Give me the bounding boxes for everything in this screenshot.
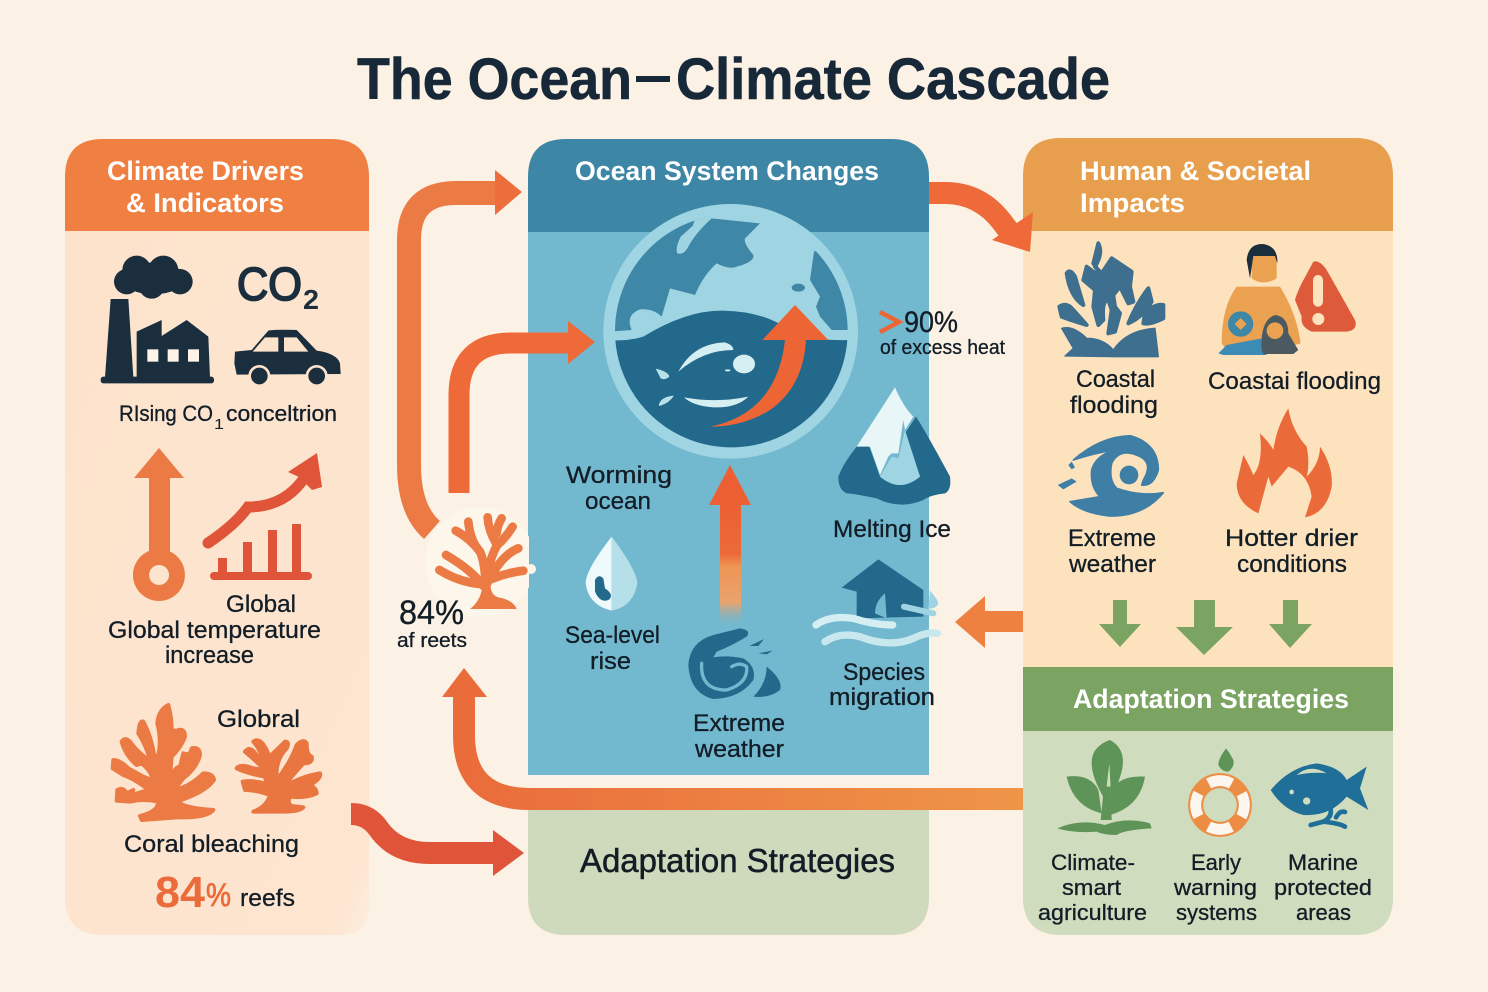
icon: flooded house (816, 559, 938, 643)
icon: water drop (586, 537, 637, 611)
stat: 84% of reefs: 84% (399, 594, 464, 632)
icon: life ring with drop (1196, 748, 1244, 829)
arrow: ocean system to human impacts (929, 193, 1033, 252)
icon: flame (1237, 408, 1332, 517)
stat: 84% reefs: reefs (240, 885, 295, 912)
label: climate-smart agriculture: agriculture (1038, 900, 1147, 925)
label: species migration: migration (829, 684, 935, 711)
icon: CO2 label: 2 (303, 284, 319, 315)
label: extreme weather: weather (694, 736, 784, 763)
panel: adaptation strategies (right) (1023, 667, 1393, 935)
label: extreme weather: Extreme (693, 710, 785, 737)
panel: human and societal impacts (1023, 138, 1393, 667)
panel header: climate drivers (65, 139, 369, 231)
icon: blue coral (1059, 243, 1163, 357)
label: melting ice: Melting Ice (833, 516, 951, 543)
panel: ocean system changes (528, 139, 929, 775)
label: extreme weather (right): Extreme (1068, 525, 1156, 552)
label: sea-level rise (565, 622, 660, 675)
icon: people with warning sign (1218, 244, 1356, 355)
label: early warning systems (1173, 850, 1257, 925)
arrow: impacts back to ocean system (955, 596, 1023, 648)
label: coastal flooding (left): flooding (1070, 392, 1158, 419)
icon: plant (1057, 740, 1152, 835)
label: early warning systems: systems (1176, 900, 1257, 925)
title: Climate Cascade (676, 47, 1110, 112)
arrows: down to adaptation (1099, 600, 1312, 655)
label: warming ocean (566, 462, 672, 515)
panel header: human and societal impacts: Human & Societal (1080, 156, 1311, 186)
label: climate-smart agriculture: Climate- (1051, 850, 1135, 875)
stat: greater than 90% of excess heat: of excess heat (880, 337, 1005, 359)
icon: central coral with halo (435, 513, 536, 609)
stat: 84% reefs: % (206, 877, 231, 913)
arrow: drivers to adaptation (351, 814, 524, 876)
panel header: climate drivers: Climate Drivers (107, 156, 304, 186)
panel header: human and societal impacts: Impacts (1080, 188, 1185, 218)
panel: adaptation strategies (centre) (528, 810, 929, 935)
stat: greater than 90% of excess heat (880, 306, 1005, 359)
label: species migration (829, 659, 935, 711)
stat: 84% of reefs (397, 594, 467, 652)
arrow: reef to ocean system, outer loop (409, 170, 522, 530)
icon: CO2 label: CO (237, 258, 302, 310)
panel header: ocean system changes: Ocean System Changes (575, 156, 879, 186)
label: hotter drier conditions (1225, 525, 1358, 578)
label: extreme weather (693, 710, 785, 763)
panel: climate drivers and indicators (65, 139, 369, 935)
label: extreme weather (right): weather (1068, 551, 1156, 578)
panel: adaptation strategies (centre): Adaptation Strategies (580, 842, 895, 879)
label: rising CO1 concentration: 1 (214, 416, 224, 433)
icon: cyclone (1058, 436, 1163, 516)
stat: 84% reefs: 84 (155, 868, 206, 917)
panel header: climate drivers: & Indicators (126, 188, 284, 218)
icon: globe with warming ocean (603, 204, 858, 460)
icon: rising trend arrow over bars (208, 453, 322, 580)
title (357, 47, 1110, 112)
label: marine protected areas: protected (1274, 875, 1372, 900)
label: species migration: Species (843, 659, 925, 686)
label: early warning systems: warning (1173, 875, 1257, 900)
label: global temperature increase: Global (226, 591, 296, 618)
icon: large coral (113, 705, 214, 820)
panel header: adaptation strategies (1023, 667, 1393, 731)
label: global: Globral (217, 706, 300, 733)
icon: fish (1271, 763, 1368, 827)
label: climate-smart agriculture (1038, 850, 1147, 925)
label: rising CO1 concentration: RIsing CO (119, 401, 213, 426)
label: sea-level rise: Sea-level (565, 622, 660, 649)
stat: greater than 90% of excess heat: 90% (904, 306, 958, 339)
icon: car (234, 330, 341, 387)
label: marine protected areas: Marine (1288, 850, 1358, 875)
label: marine protected areas: areas (1296, 900, 1351, 925)
arrow: reef to globe, inner loop (459, 321, 595, 493)
label: warming ocean: ocean (585, 488, 651, 515)
label: marine protected areas (1274, 850, 1372, 925)
label: climate-smart agriculture: smart (1062, 875, 1121, 900)
label: rising CO1 concentration: conceltrion (226, 401, 337, 426)
icon: small coral (237, 740, 320, 812)
title: The Ocean (357, 47, 632, 112)
label: coastal flooding (right): Coastai flooding (1208, 368, 1381, 395)
label: coastal flooding (left) (1070, 366, 1158, 419)
arrow: up to globe (709, 465, 751, 628)
icon: thermometer arrow (133, 448, 185, 601)
icon: swirling storm (688, 628, 781, 699)
icon: melting iceberg (838, 387, 950, 505)
label: early warning systems: Early (1191, 850, 1241, 875)
arrow: adaptation back to reefs (442, 668, 1023, 799)
label: hotter drier conditions: conditions (1237, 551, 1347, 578)
label: global temperature increase: increase (165, 642, 254, 669)
icon: factory with smoke (101, 256, 214, 383)
label: global temperature increase: Global temperature (108, 617, 321, 644)
label: sea-level rise: rise (590, 648, 631, 675)
stat: 84% of reefs: af reets (397, 630, 467, 652)
panel header: ocean system changes (528, 139, 929, 232)
label: warming ocean: Worming (566, 462, 672, 489)
label: hotter drier conditions: Hotter drier (1225, 525, 1358, 552)
panel header: human and societal impacts (1023, 138, 1393, 231)
label: coral bleaching: Coral bleaching (124, 831, 299, 858)
label: global temperature increase (108, 591, 321, 669)
label: coastal flooding (left): Coastal (1076, 366, 1155, 393)
panel header: adaptation strategies: Adaptation Strategies (1073, 684, 1349, 714)
stat: 84% reefs (155, 868, 295, 917)
label: rising CO1 concentration (119, 401, 337, 433)
label: extreme weather (right) (1068, 525, 1156, 578)
